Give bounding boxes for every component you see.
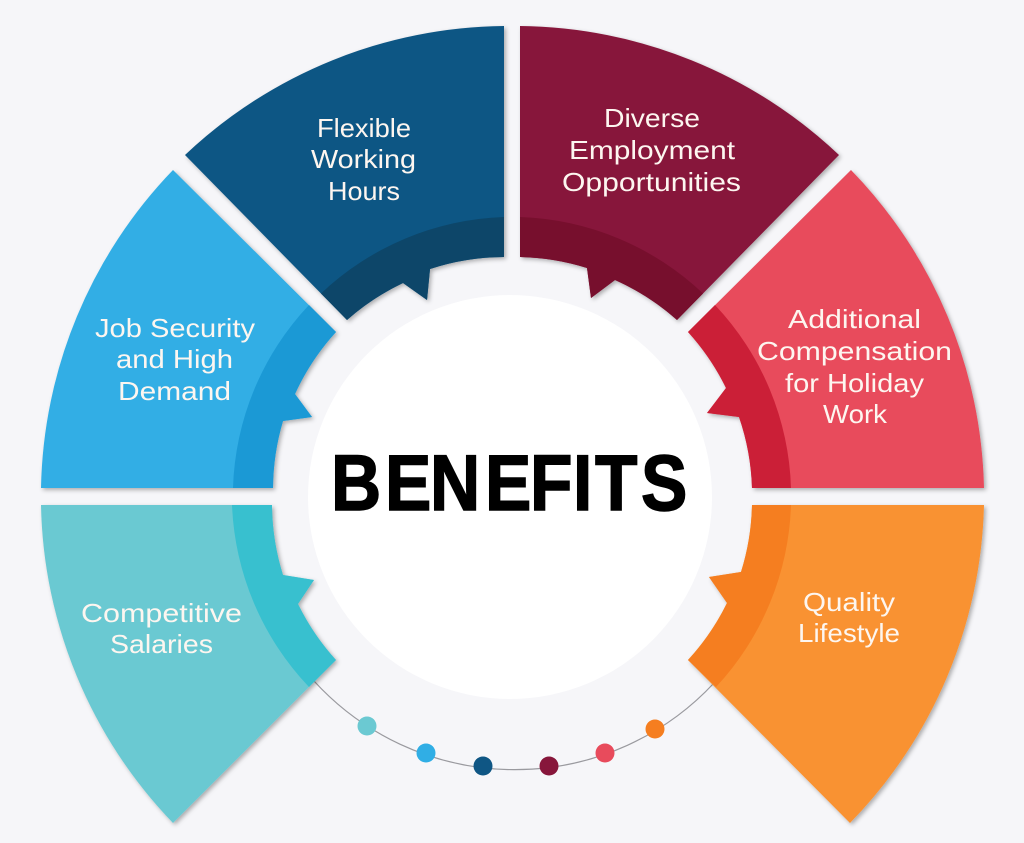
label: Additional Compensation for Holiday Work: for Holiday bbox=[785, 368, 924, 398]
label: Diverse Employment Opportunities: Diverse bbox=[604, 103, 700, 133]
label: Quality Lifestyle bbox=[798, 587, 900, 648]
panel: Competitive Salaries bbox=[41, 505, 336, 823]
label: Competitive Salaries bbox=[81, 598, 242, 659]
connector arc with dots bbox=[314, 681, 714, 776]
label: Diverse Employment Opportunities: Opportunities bbox=[562, 167, 741, 197]
label: Quality Lifestyle: Lifestyle bbox=[798, 618, 900, 648]
label: Job Security and High Demand: Job Security bbox=[95, 313, 255, 343]
label: Additional Compensation for Holiday Work: Work bbox=[823, 399, 888, 429]
panel: Flexible Working Hours bbox=[185, 26, 504, 320]
label: Job Security and High Demand bbox=[95, 313, 255, 406]
panel: Additional Compensation for Holiday Work bbox=[688, 170, 984, 488]
center circle bbox=[308, 295, 712, 699]
label: Job Security and High Demand: and High bbox=[116, 344, 233, 374]
panel: Diverse Employment Opportunities bbox=[520, 26, 839, 320]
panel: Quality Lifestyle bbox=[688, 505, 984, 823]
label: Flexible Working Hours bbox=[311, 113, 416, 206]
label: Competitive Salaries: Salaries bbox=[110, 629, 213, 659]
label: Diverse Employment Opportunities bbox=[562, 103, 741, 197]
label: Additional Compensation for Holiday Work: Compensation bbox=[757, 336, 952, 366]
label: Additional Compensation for Holiday Work bbox=[757, 304, 952, 429]
label: Diverse Employment Opportunities: Employment bbox=[569, 135, 736, 165]
label: Additional Compensation for Holiday Work: Additional bbox=[788, 304, 921, 334]
title: BENEFITS: BENEFITS bbox=[331, 439, 687, 527]
label: Flexible Working Hours: Hours bbox=[328, 176, 400, 206]
label: Quality Lifestyle: Quality bbox=[803, 587, 895, 617]
label: Flexible Working Hours: Working bbox=[311, 144, 416, 174]
label: Competitive Salaries: Competitive bbox=[81, 598, 242, 628]
label: Job Security and High Demand: Demand bbox=[118, 376, 231, 406]
label: Flexible Working Hours: Flexible bbox=[317, 113, 411, 143]
panel: Job Security and High Demand bbox=[41, 170, 336, 488]
